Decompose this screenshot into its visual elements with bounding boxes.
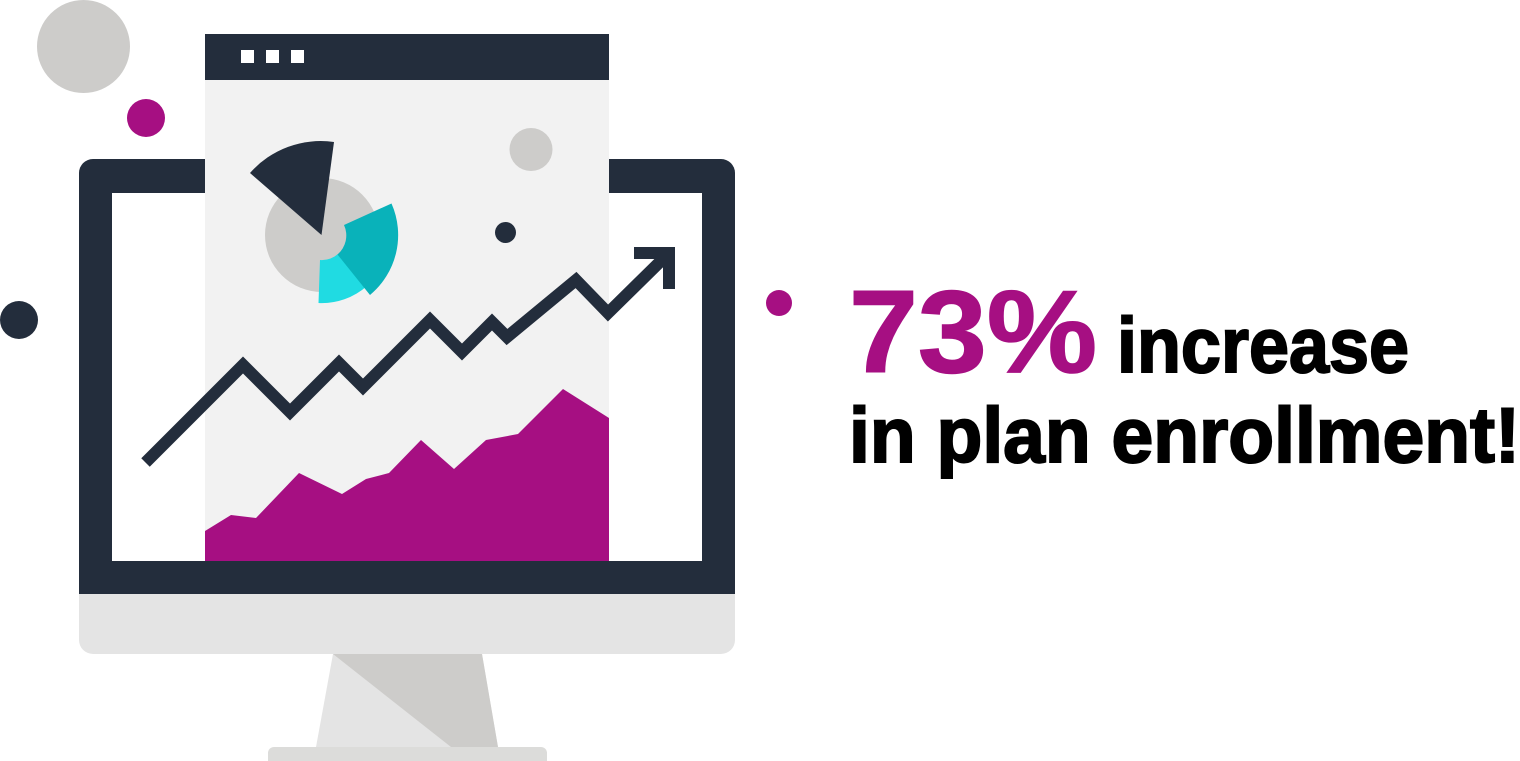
pie segment teal — [338, 204, 398, 295]
monitor chin — [79, 594, 735, 654]
decorative circle: purple beside text — [766, 290, 792, 316]
circle: gray in window — [510, 128, 552, 171]
pie segment navy — [250, 141, 334, 235]
area chart — [205, 389, 609, 561]
pie segment cyan — [318, 254, 367, 303]
monitor base — [268, 747, 547, 761]
pie base gray — [265, 178, 379, 292]
browser window panel — [205, 34, 609, 561]
trend line arrow — [146, 253, 669, 462]
monitor frame — [79, 159, 735, 594]
circle: navy in window — [495, 222, 516, 243]
headline text — [849, 266, 1520, 479]
decorative circle: navy — [0, 301, 38, 339]
stat 73%: 73% — [849, 266, 1097, 397]
window body — [205, 80, 609, 561]
monitor stand — [316, 654, 498, 747]
window control dots — [241, 50, 304, 63]
decorative circle: purple — [127, 99, 165, 137]
radial pie chart — [250, 141, 398, 303]
decorative circle: large gray — [37, 0, 130, 93]
word increase: increase — [1117, 301, 1409, 389]
monitor screen — [112, 193, 702, 561]
monitor — [79, 159, 735, 761]
window title bar — [205, 34, 609, 80]
